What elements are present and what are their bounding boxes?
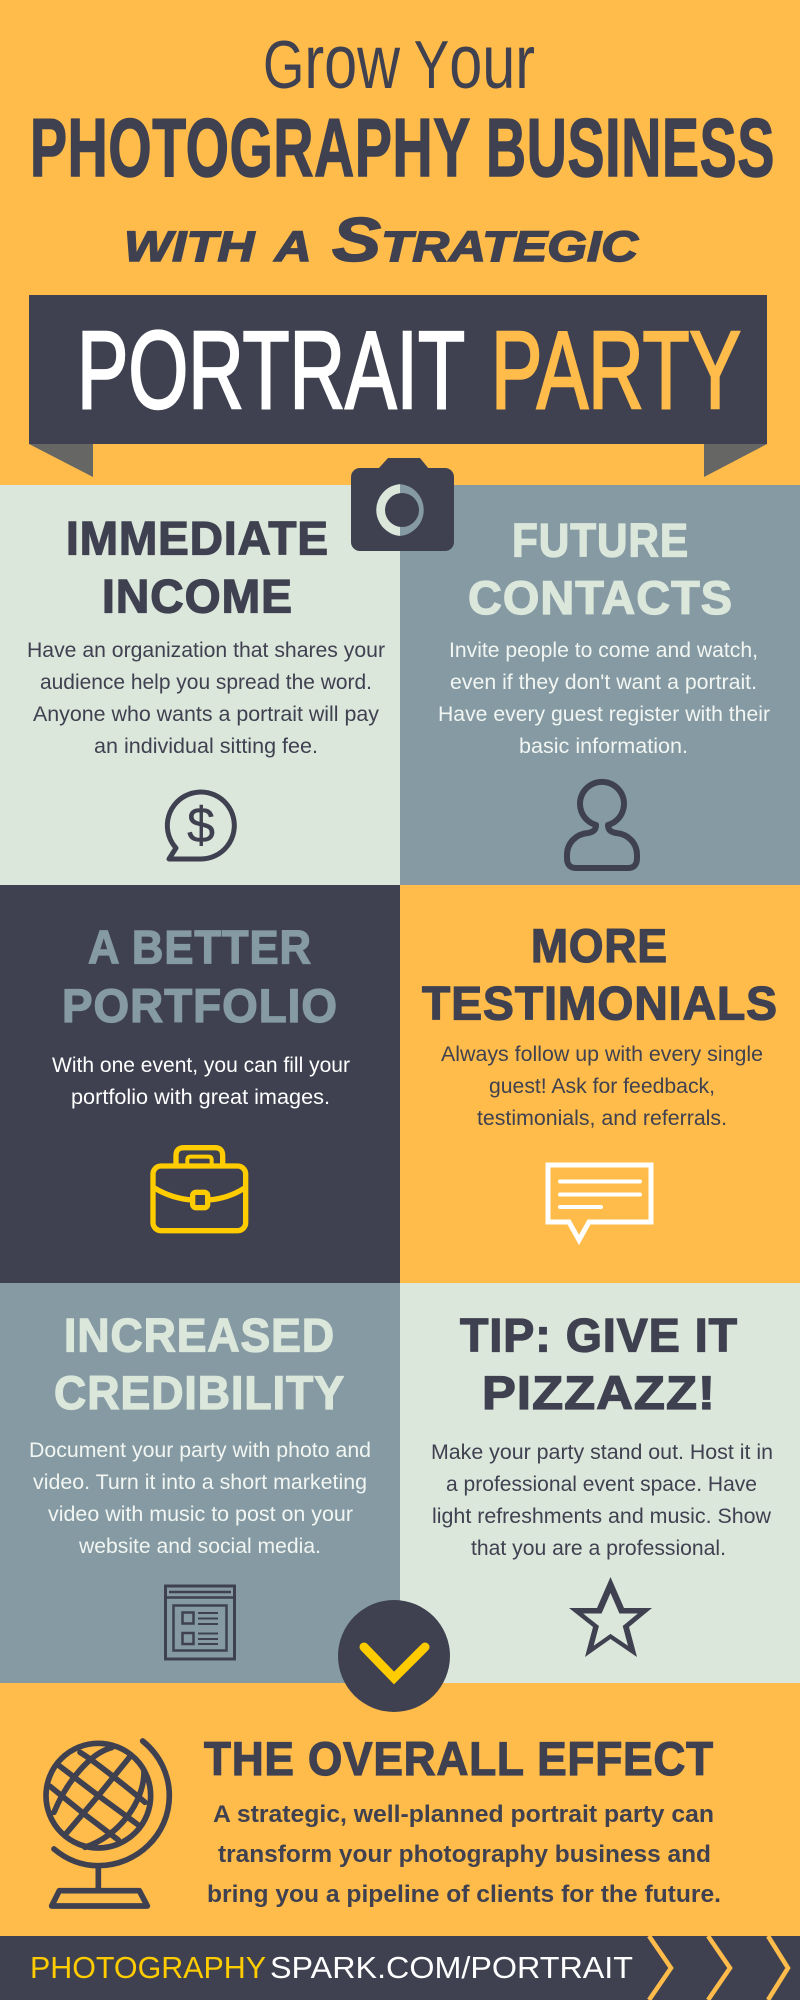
heading: increased credibility: INCREASED — [64, 1308, 335, 1362]
panel: the overall effect — [0, 1683, 800, 1936]
body text: immediate income: audience help you spread the word. — [40, 670, 372, 694]
panel: more testimonials — [400, 885, 800, 1283]
heading: more testimonials: TESTIMONIALS — [422, 976, 778, 1030]
icon: briefcase — [153, 1148, 246, 1231]
title line: with a Strategic: with a Strategic — [124, 206, 639, 275]
body text: increased credibility: website and social media. — [78, 1534, 321, 1558]
body text: increased credibility: Document your party with photo and — [29, 1438, 371, 1462]
heading: immediate income: INCOME — [102, 570, 293, 622]
heading: future contacts — [468, 514, 733, 624]
heading: tip give it pizzazz: TIP: GIVE IT — [460, 1308, 738, 1362]
heading: increased credibility — [54, 1308, 345, 1419]
icon: chat bubble — [548, 1165, 651, 1240]
title line: Grow your: Grow Your — [263, 20, 535, 105]
icon: person — [567, 782, 637, 868]
body text: future contacts: even if they don't want a portrait. — [450, 670, 757, 694]
icon: star — [569, 1577, 652, 1657]
icon: chevron down circle — [338, 1600, 450, 1712]
heading: a better portfolio: A BETTER — [88, 920, 312, 974]
heading: more testimonials — [422, 919, 778, 1030]
body text: increased credibility: video with music to post on your — [48, 1502, 353, 1526]
footer url: PHOTOGRAPHY — [30, 1950, 266, 1985]
body text: a better portfolio — [52, 1053, 350, 1109]
body text: increased credibility: video. Turn it into a short marketing — [33, 1470, 367, 1494]
heading: tip give it pizzazz: PIZZAZZ! — [482, 1366, 716, 1419]
body text: the overall effect — [207, 1801, 721, 1908]
heading: a better portfolio — [62, 920, 338, 1032]
body text: the overall effect: A strategic, well-planned portrait party can — [213, 1801, 714, 1828]
panel: tip give it pizzazz — [400, 1283, 800, 1683]
heading: the overall effect: THE OVERALL EFFECT — [204, 1732, 714, 1785]
heading: immediate income: IMMEDIATE — [66, 512, 329, 564]
body text: more testimonials — [441, 1042, 763, 1130]
body text: tip give it pizzazz: a professional event space. Have — [446, 1472, 757, 1496]
body text: immediate income: Anyone who wants a portrait will pay — [33, 702, 379, 726]
panel: future contacts — [400, 485, 800, 885]
panel: increased credibility — [0, 1283, 400, 1683]
footer bar — [0, 1936, 800, 2000]
body text: immediate income — [27, 638, 385, 758]
body text: future contacts: Invite people to come and watch, — [449, 638, 758, 662]
body text: increased credibility — [29, 1438, 371, 1558]
body text: future contacts: basic information. — [519, 734, 688, 758]
body text: future contacts: Have every guest register with their — [438, 702, 770, 726]
footer url: SPARK.COM/PORTRAIT — [270, 1950, 633, 1985]
heading: immediate income — [66, 512, 329, 622]
heading: a better portfolio: PORTFOLIO — [62, 979, 338, 1032]
heading: more testimonials: MORE — [531, 919, 668, 972]
footer url — [30, 1950, 633, 1985]
body text: a better portfolio: portfolio with great images. — [71, 1085, 330, 1109]
heading: increased credibility: CREDIBILITY — [54, 1366, 345, 1419]
body text: immediate income: Have an organization that shares your — [27, 638, 385, 662]
heading: tip give it pizzazz — [460, 1308, 738, 1419]
body text: more testimonials: guest! Ask for feedback, — [489, 1074, 715, 1098]
title block — [30, 20, 775, 275]
footer arrows — [649, 1936, 788, 2000]
icon: globe — [46, 1741, 169, 1906]
icon: camera — [351, 458, 454, 551]
body text: tip give it pizzazz: Make your party stand out. Host it in — [431, 1440, 773, 1464]
body text: the overall effect: bring you a pipeline of clients for the future. — [207, 1881, 721, 1908]
body text: tip give it pizzazz: that you are a professional. — [471, 1536, 726, 1560]
icon: newspaper — [165, 1586, 235, 1659]
banner text: Portrait: PORTRAIT — [77, 309, 465, 432]
body text: tip give it pizzazz — [431, 1440, 773, 1560]
icon: dollar speech bubble: $ — [187, 797, 215, 853]
heading: future contacts: FUTURE — [512, 514, 689, 566]
body text: tip give it pizzazz: light refreshments and music. Show — [432, 1504, 771, 1528]
body text: immediate income: an individual sitting fee. — [94, 734, 318, 758]
ribbon banner — [29, 295, 767, 477]
body text: more testimonials: testimonials, and referrals. — [477, 1106, 727, 1130]
body text: a better portfolio: With one event, you can fill your — [52, 1053, 350, 1077]
panel: a better portfolio — [0, 885, 400, 1283]
icon: dollar speech bubble — [167, 792, 234, 859]
body text: the overall effect: transform your photography business and — [218, 1841, 711, 1868]
panel: immediate income — [0, 485, 400, 885]
body text: more testimonials: Always follow up with every single — [441, 1042, 763, 1066]
body text: future contacts — [438, 638, 770, 758]
heading: future contacts: CONTACTS — [468, 571, 733, 624]
